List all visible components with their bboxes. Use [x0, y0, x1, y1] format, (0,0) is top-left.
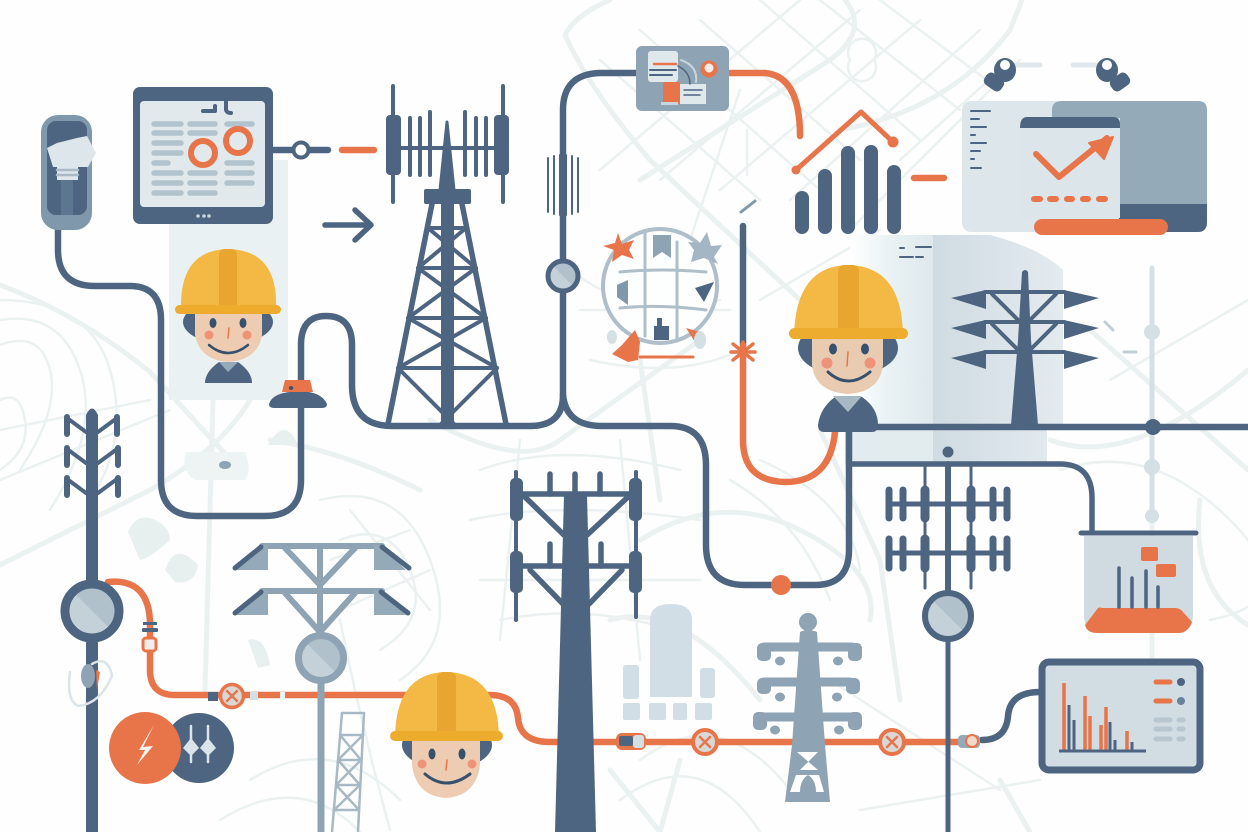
- junction hub on vertical cable: [548, 155, 578, 291]
- small antenna mark: [741, 201, 755, 212]
- pale transformer: [623, 604, 715, 720]
- worker top left: [175, 249, 281, 383]
- control box: [636, 46, 729, 111]
- monitor with bar chart: [1042, 662, 1200, 770]
- orange coupler on left cable: [142, 622, 158, 651]
- beaker top rail: [1081, 530, 1196, 536]
- grey transmission tower: [753, 613, 862, 802]
- network nodes: [771, 575, 791, 595]
- orange cables: [108, 73, 960, 742]
- antenna array right: [889, 464, 1008, 832]
- arrow: [325, 210, 371, 240]
- pale leaf marks: [128, 430, 298, 668]
- sensor beaker with chart: [1084, 536, 1193, 633]
- large dark pylon: [510, 472, 642, 832]
- vertical pale cable with nodes: [1144, 268, 1160, 523]
- worker bottom: [390, 672, 503, 798]
- dashboard panel with trend: [962, 101, 1207, 235]
- worker right: [789, 265, 908, 432]
- cable clamp device: [269, 380, 327, 408]
- T-frame pylon: [235, 545, 409, 832]
- left utility pole: [65, 408, 119, 832]
- tablet with report: [133, 87, 273, 224]
- tablet connector: [273, 142, 328, 158]
- globe with markers: [603, 229, 722, 362]
- sensors top right: [982, 58, 1132, 93]
- pale building with pylon: [849, 235, 1136, 462]
- navy cables over building: [849, 419, 1248, 532]
- alert and control badges: [109, 712, 234, 784]
- valves along orange line: [208, 684, 980, 754]
- pale panel behind worker: [169, 160, 288, 400]
- phone device: [41, 115, 96, 230]
- orange cable coupler: [731, 342, 755, 362]
- communications tower: [386, 86, 509, 424]
- main navy cable network: [58, 73, 1040, 740]
- bar chart with rising line: [792, 112, 901, 234]
